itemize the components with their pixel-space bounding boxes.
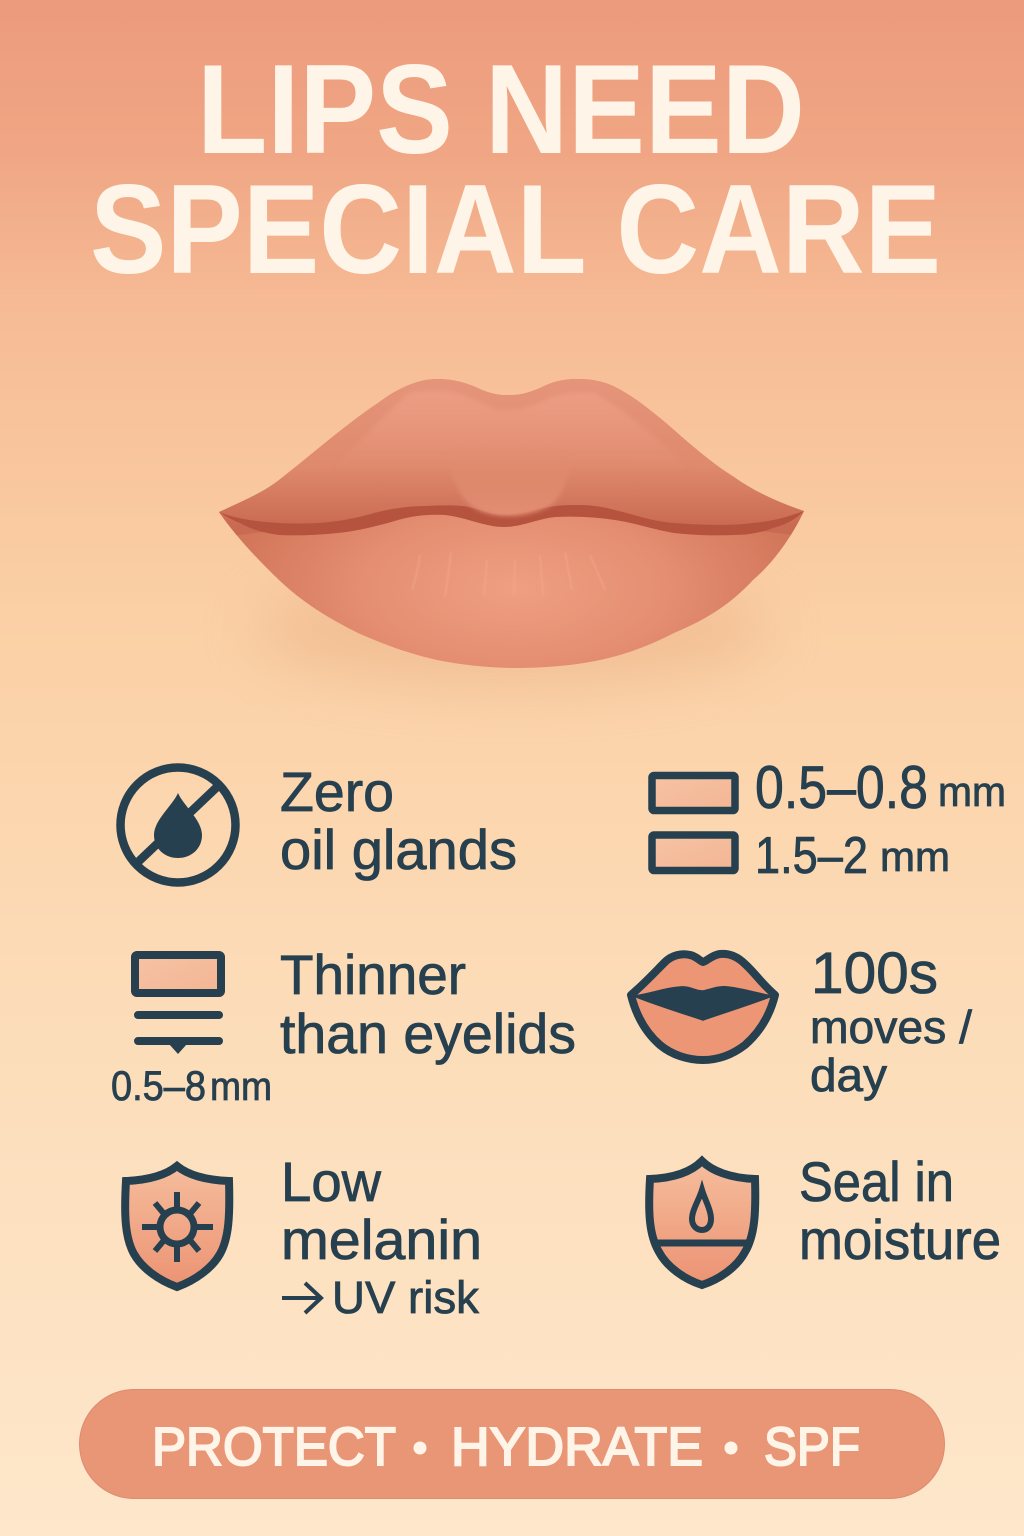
text: thickness: than eyelids xyxy=(280,1002,576,1065)
text: 100s moves per day: moves / xyxy=(810,1001,972,1053)
banner: protect hydrate spf: PROTECT xyxy=(152,1417,396,1477)
banner: protect hydrate spf xyxy=(80,1390,944,1498)
text: low melanin UV risk: Low xyxy=(281,1150,382,1213)
text: thin measure: 0.5–0.8 xyxy=(755,754,928,821)
text: thickness: Thinner xyxy=(280,943,466,1006)
mouth line xyxy=(219,505,804,535)
title: LIPS NEED xyxy=(197,38,805,180)
icon: lips outline xyxy=(631,954,775,1060)
label: eyelid thickness xyxy=(111,1062,272,1109)
banner: protect hydrate spf: HYDRATE xyxy=(451,1417,703,1477)
text: seal in moisture xyxy=(799,1150,1001,1271)
icon: drop shield xyxy=(649,1161,755,1285)
title xyxy=(90,38,941,300)
icon: sun shield xyxy=(125,1166,229,1287)
label: eyelid thickness: mm xyxy=(210,1065,272,1109)
text: zero oil glands: oil glands xyxy=(280,818,517,881)
icon: no oil drop xyxy=(120,768,236,882)
lips illustration xyxy=(200,379,830,685)
text: 100s moves per day: day xyxy=(810,1049,887,1101)
banner: protect hydrate spf: SPF xyxy=(764,1417,860,1477)
title: SPECIAL CARE xyxy=(90,158,941,300)
arrow xyxy=(282,1283,321,1313)
text: seal in moisture: Seal in xyxy=(799,1150,954,1213)
item: lip thickness xyxy=(111,943,576,1109)
item: low melanin xyxy=(125,1150,482,1323)
text: low melanin UV risk: melanin xyxy=(281,1208,482,1271)
text: low melanin UV risk xyxy=(281,1150,482,1323)
item: seal moisture xyxy=(649,1150,1001,1285)
text: zero oil glands: Zero xyxy=(280,760,394,823)
text: 100s moves per day: 100s xyxy=(811,941,938,1006)
item: measurements xyxy=(652,754,1006,885)
icon: thick rectangle xyxy=(652,835,735,870)
icon: thin rectangle xyxy=(652,776,735,810)
text: seal in moisture: moisture xyxy=(799,1208,1001,1271)
text: low melanin UV risk: UV risk xyxy=(332,1272,480,1323)
text: zero oil glands xyxy=(280,760,517,881)
lip creases xyxy=(412,556,598,588)
text: thick measure: mm xyxy=(880,833,950,880)
text: thick measure xyxy=(755,827,950,885)
item: lip movement xyxy=(631,941,972,1101)
cupid's bow highlight xyxy=(386,393,630,424)
text: 100s moves per day xyxy=(810,941,972,1101)
text: thin measure: mm xyxy=(938,768,1006,815)
text: thickness xyxy=(280,943,576,1065)
central tubercle xyxy=(460,485,562,518)
item: zero oil glands xyxy=(120,760,517,882)
icon: thickness bars xyxy=(135,955,221,1054)
text: thick measure: 1.5–2 xyxy=(755,827,868,885)
label: eyelid thickness: 0.5–8 xyxy=(111,1062,206,1109)
